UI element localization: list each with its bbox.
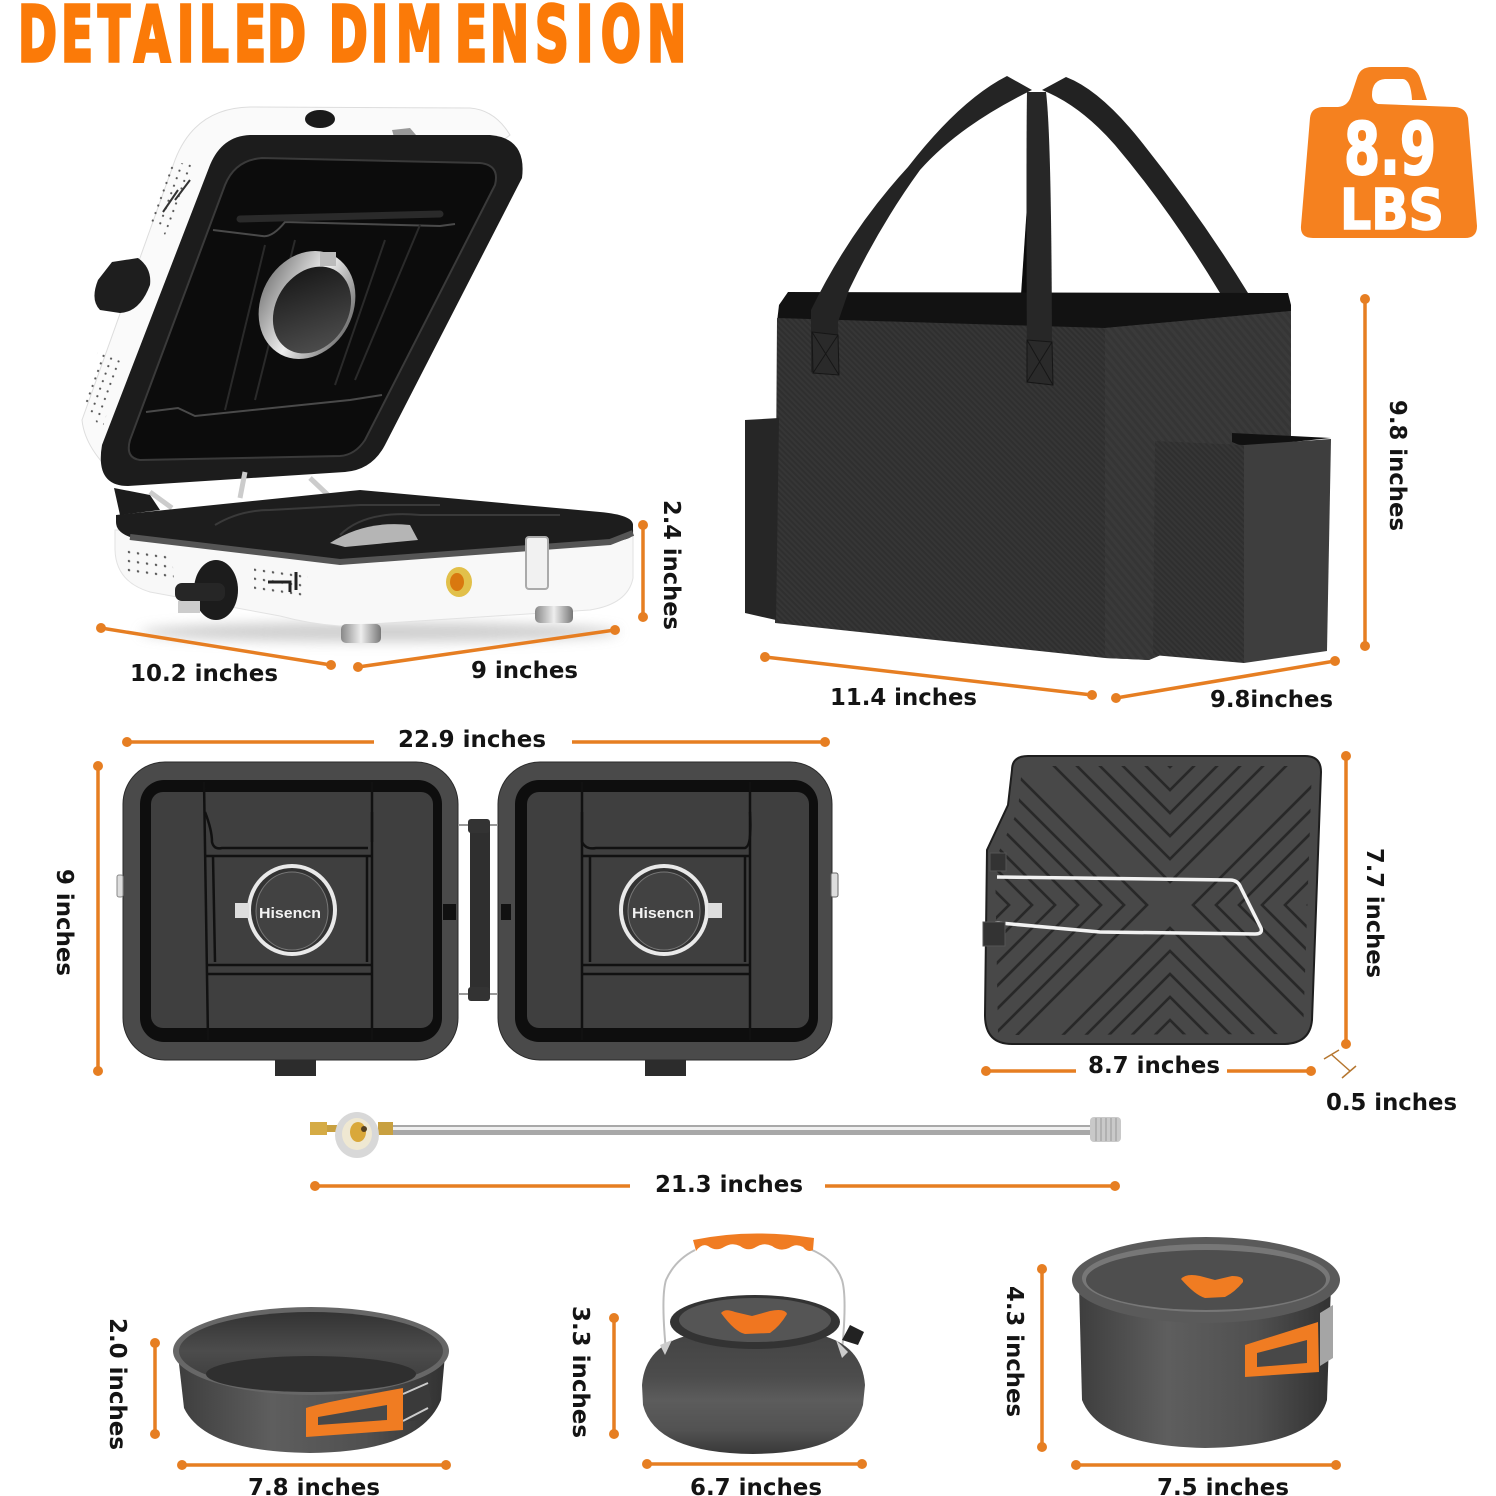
right pocket xyxy=(1153,433,1331,663)
bag rear handle xyxy=(1042,77,1248,293)
dimension: 8.7 inches: 8.7 inches xyxy=(1088,1053,1220,1079)
mat wire rest xyxy=(992,877,1261,934)
left half: Hisencn xyxy=(259,905,321,922)
dimension: 9 inches: 9 inches xyxy=(471,658,578,684)
dimension: 22.9 inches: 22.9 inches xyxy=(398,727,546,753)
dimension: 9.8 inches width xyxy=(1111,656,1340,713)
dimension: 21.3 inches: 21.3 inches xyxy=(655,1172,803,1198)
dimension: 3.3 inches xyxy=(567,1306,619,1439)
dimension: 9 inches height xyxy=(51,761,103,1076)
right half xyxy=(498,762,838,1076)
dimension: 7.5 inches xyxy=(1071,1460,1341,1496)
dimension: 3.3 inches: 3.3 inches xyxy=(567,1306,593,1438)
feet xyxy=(341,606,573,643)
base knob xyxy=(175,560,238,620)
dimension: 11.4 inches: 11.4 inches xyxy=(830,685,977,711)
left handle xyxy=(811,76,1032,375)
dimension: 2.0 inches xyxy=(104,1318,160,1450)
gas hose xyxy=(310,1112,1121,1158)
dimension: 10.2 inches: 10.2 inches xyxy=(130,661,278,687)
left pocket xyxy=(745,418,779,620)
dimension: 2.0 inches: 2.0 inches xyxy=(104,1318,130,1450)
bag body xyxy=(775,311,1291,660)
dimension: 9.8 inches height: 9.8 inches xyxy=(1384,400,1410,531)
left handle patch xyxy=(812,332,839,375)
hinge bar xyxy=(443,819,511,1001)
base white body xyxy=(115,530,633,626)
icon: weight badge 8.9 lbs xyxy=(1301,67,1477,243)
stove open, three-quarter view xyxy=(82,107,633,643)
left half xyxy=(117,762,458,1076)
silicone mat xyxy=(982,755,1322,1045)
dimension: 10.2 inches xyxy=(96,623,336,687)
gas inlet xyxy=(446,567,472,597)
pan orange handle xyxy=(306,1382,432,1437)
dimension: 0.5 inches xyxy=(1324,1050,1457,1116)
kettle orange grip xyxy=(693,1233,814,1251)
dimension: 7.7 inches: 7.7 inches xyxy=(1361,848,1387,978)
dimension: 6.7 inches xyxy=(642,1459,867,1496)
icon: weight badge 8.9 lbs: 8.9 xyxy=(1344,107,1436,191)
storage bag xyxy=(745,76,1331,663)
dimension: 7.7 inches xyxy=(1341,751,1387,1049)
dimension: 4.3 inches: 4.3 inches xyxy=(1001,1286,1027,1417)
front centre strap xyxy=(1026,92,1052,385)
cooking pot xyxy=(1072,1237,1340,1448)
dimension: 9 inches xyxy=(353,625,620,684)
base shadow xyxy=(140,622,620,642)
base speaker dots xyxy=(122,546,308,602)
dimension: 9 inches height: 9 inches xyxy=(51,869,77,976)
dimension: 11.4 inches xyxy=(760,652,1097,711)
mat chevron grooves xyxy=(996,766,1312,1035)
pot lid knob xyxy=(1181,1275,1243,1298)
latch xyxy=(526,537,548,589)
lid burner xyxy=(240,234,374,376)
dimension: 21.3 inches xyxy=(310,1172,1120,1198)
dimension: 2.4 inches xyxy=(638,500,684,630)
centre strap patch xyxy=(1027,340,1053,385)
dimension: 2.4 inches: 2.4 inches xyxy=(658,500,684,630)
lid speaker dots xyxy=(84,162,195,430)
lid white back xyxy=(82,107,510,480)
dimension: 22.9 inches xyxy=(122,727,830,753)
pot orange handle xyxy=(1245,1305,1333,1377)
stove open flat, top view xyxy=(117,762,838,1076)
dimension: 9.8 inches width: 9.8inches xyxy=(1210,687,1333,713)
dimension: 0.5 inches: 0.5 inches xyxy=(1326,1090,1457,1116)
lid black interior xyxy=(101,135,523,486)
right half: Hisencn xyxy=(632,905,694,922)
dimension: 8.7 inches xyxy=(981,1053,1316,1079)
kettle xyxy=(642,1233,865,1454)
dimension: 7.8 inches xyxy=(177,1460,451,1496)
lid knob xyxy=(94,258,150,313)
frying pan xyxy=(173,1307,449,1453)
kettle lid knob xyxy=(721,1310,787,1334)
bag rim xyxy=(777,292,1291,332)
rear centre strap xyxy=(1021,160,1034,295)
bag side panel xyxy=(1105,311,1291,660)
base black tray xyxy=(116,490,633,562)
hinge xyxy=(114,488,160,515)
icon: weight badge 8.9 lbs: LBS xyxy=(1340,178,1444,243)
dimension: 9.8 inches height xyxy=(1360,294,1410,651)
dimension: 4.3 inches xyxy=(1001,1264,1047,1452)
